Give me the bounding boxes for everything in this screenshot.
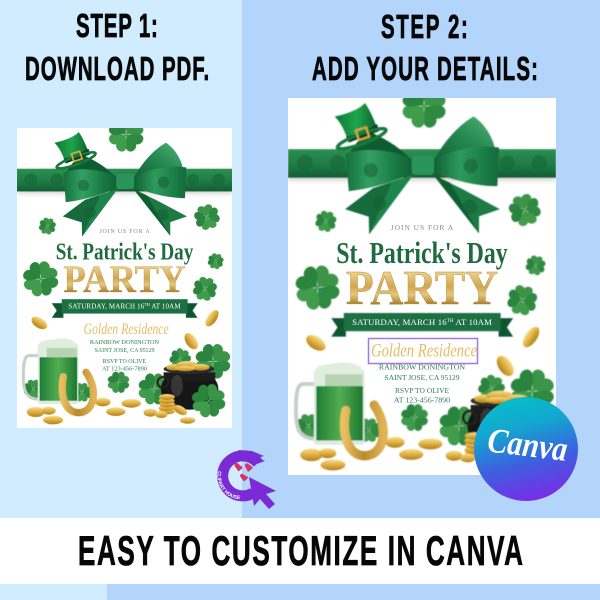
heading: step 2: STEP 2: (381, 8, 468, 45)
invitation text: PARTY (63, 259, 186, 301)
selection box around venue name (368, 338, 478, 364)
heading: step 2 (312, 8, 538, 87)
invitation text: SATURDAY, MARCH 16 (68, 303, 144, 311)
invitation text: Golden Residence (84, 321, 169, 338)
invitation text: Golden Residence (371, 341, 477, 362)
heading: step 2: ADD YOUR DETAILS: (312, 50, 538, 87)
invitation text: JOIN US FOR A (391, 223, 454, 232)
invitation text: RSVP TO OLIVE (103, 359, 147, 365)
heading: step 1 (25, 7, 209, 87)
panel: left background (0, 0, 242, 600)
invitation text: AT 123-456-7890 (394, 395, 450, 404)
invitation text: PARTY (346, 262, 498, 315)
icon: Clipart House logo (217, 450, 276, 509)
invitation text (56, 229, 193, 372)
invitation text: RSVP TO OLIVE (395, 386, 449, 395)
panel: invitation card step 1 (17, 128, 232, 428)
invitation text: SAINT JOSE, CA 95129 (385, 373, 460, 382)
heading: step 1: STEP 1: (76, 7, 158, 44)
panel: white caption band (0, 518, 600, 584)
panel: invitation card step 2 (218, 98, 578, 500)
panel: lower right strip (107, 583, 600, 600)
icon: Canva badge: Canva (486, 420, 570, 469)
invitation text: RAINBOW DONINGTON (90, 340, 160, 346)
caption: easy to customize: EASY TO CUSTOMIZE IN CANVA (78, 528, 523, 575)
invitation text: St. Patrick's Day (56, 239, 193, 265)
invitation text: JOIN US FOR A (99, 229, 150, 235)
invitation text: St. Patrick's Day (336, 236, 508, 270)
heading: step 1: DOWNLOAD PDF. (25, 50, 209, 87)
icon: Clipart House logo: CLIPART HOUSE (218, 471, 240, 500)
invitation text: AT 10AM (454, 317, 492, 327)
invitation text: RAINBOW DONINGTON (379, 363, 466, 372)
invitation text: AT 123-456-7890 (102, 366, 147, 372)
icon: Canva badge (474, 397, 578, 501)
invitation text: TH (447, 319, 454, 324)
invitation text: AT 10AM (150, 303, 181, 311)
invitation text (336, 223, 508, 404)
invitation text: SATURDAY, MARCH 16 (352, 317, 447, 327)
panel: right background (242, 0, 600, 518)
invitation text: SAINT JOSE, CA 95129 (94, 348, 155, 354)
invitation text: TH (144, 302, 150, 307)
